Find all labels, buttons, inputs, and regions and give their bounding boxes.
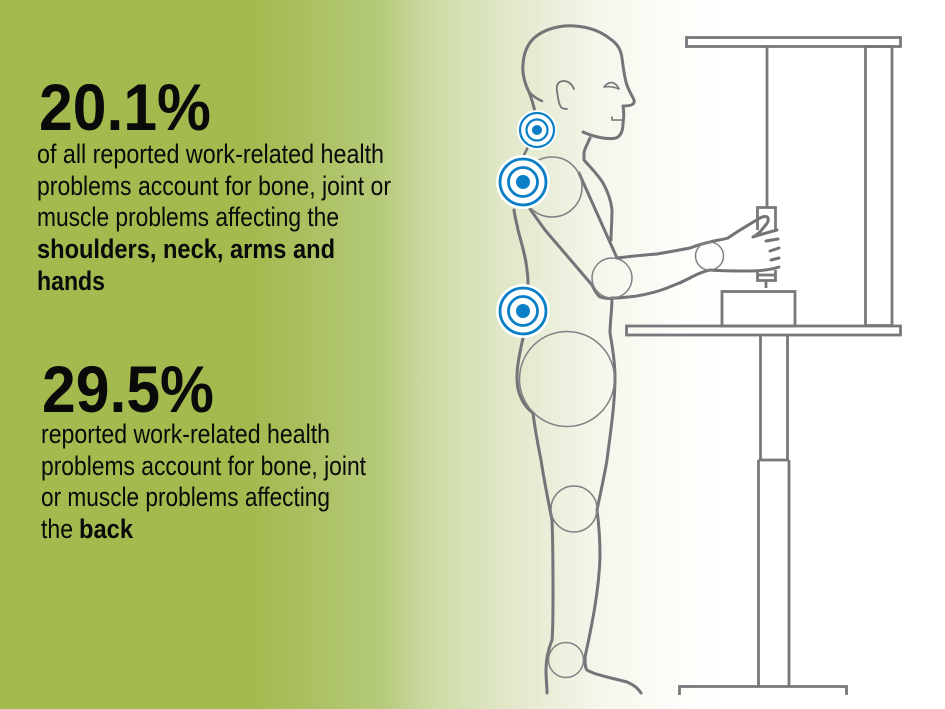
joint circle: shoulder: [522, 157, 582, 217]
right upright column: [866, 46, 892, 326]
description: shoulders, neck, arms and hands: muscle problems affecting the: [37, 202, 339, 232]
fingers: [766, 239, 779, 260]
workstation: shelf, columns, tool and table: [626, 38, 900, 695]
table top: [626, 326, 900, 335]
icon: shoulder target: [496, 155, 550, 209]
description: shoulders, neck, arms and hands: problems account for bone, joint or: [37, 171, 391, 201]
back outline: [514, 210, 553, 693]
mouth: [612, 117, 623, 120]
text block: back statistic: [41, 352, 366, 544]
description: shoulders, neck, arms and hands: of all reported work-related health: [37, 139, 384, 169]
description: shoulders, neck, arms and hands: [37, 139, 391, 296]
joint circle: wrist: [696, 242, 724, 270]
description: back: problems account for bone, joint: [41, 451, 366, 481]
table leg: [758, 335, 789, 686]
statistic: 29.5%: 29.5%: [42, 352, 214, 426]
head and face outline: [523, 26, 634, 139]
joint circle: hip: [520, 332, 614, 426]
description: shoulders, neck, arms and hands: shoulders, neck, arms and: [37, 234, 335, 264]
top shelf: [686, 38, 900, 46]
icon: back target: [496, 284, 550, 338]
tool rod: [766, 46, 768, 207]
workpiece block: [722, 292, 795, 326]
nape line: [523, 92, 542, 157]
eye: [604, 83, 619, 89]
description: back: reported work-related health: [41, 419, 330, 449]
tool handle: [758, 208, 776, 280]
joint circle: knee: [551, 486, 597, 532]
tool pin: [765, 281, 767, 288]
ear: [557, 81, 574, 109]
text block: shoulders, neck, arms and hands statistic: [37, 70, 391, 296]
arm and hand: [530, 173, 779, 298]
joint circle: ankle: [548, 642, 584, 678]
description: back: [41, 419, 366, 544]
icon: neck target: [517, 110, 557, 150]
description: back: or muscle problems affecting: [41, 482, 330, 512]
description: back: the: [41, 514, 73, 544]
front of torso and leg: [585, 298, 641, 693]
joint circle: elbow: [592, 258, 632, 298]
human figure: [514, 26, 779, 693]
table base: [680, 686, 846, 695]
statistic: 20.1%: 20.1%: [39, 70, 211, 144]
neck and chest: [584, 138, 612, 240]
description: back: back: [79, 514, 134, 544]
description: shoulders, neck, arms and hands: hands: [37, 266, 105, 296]
